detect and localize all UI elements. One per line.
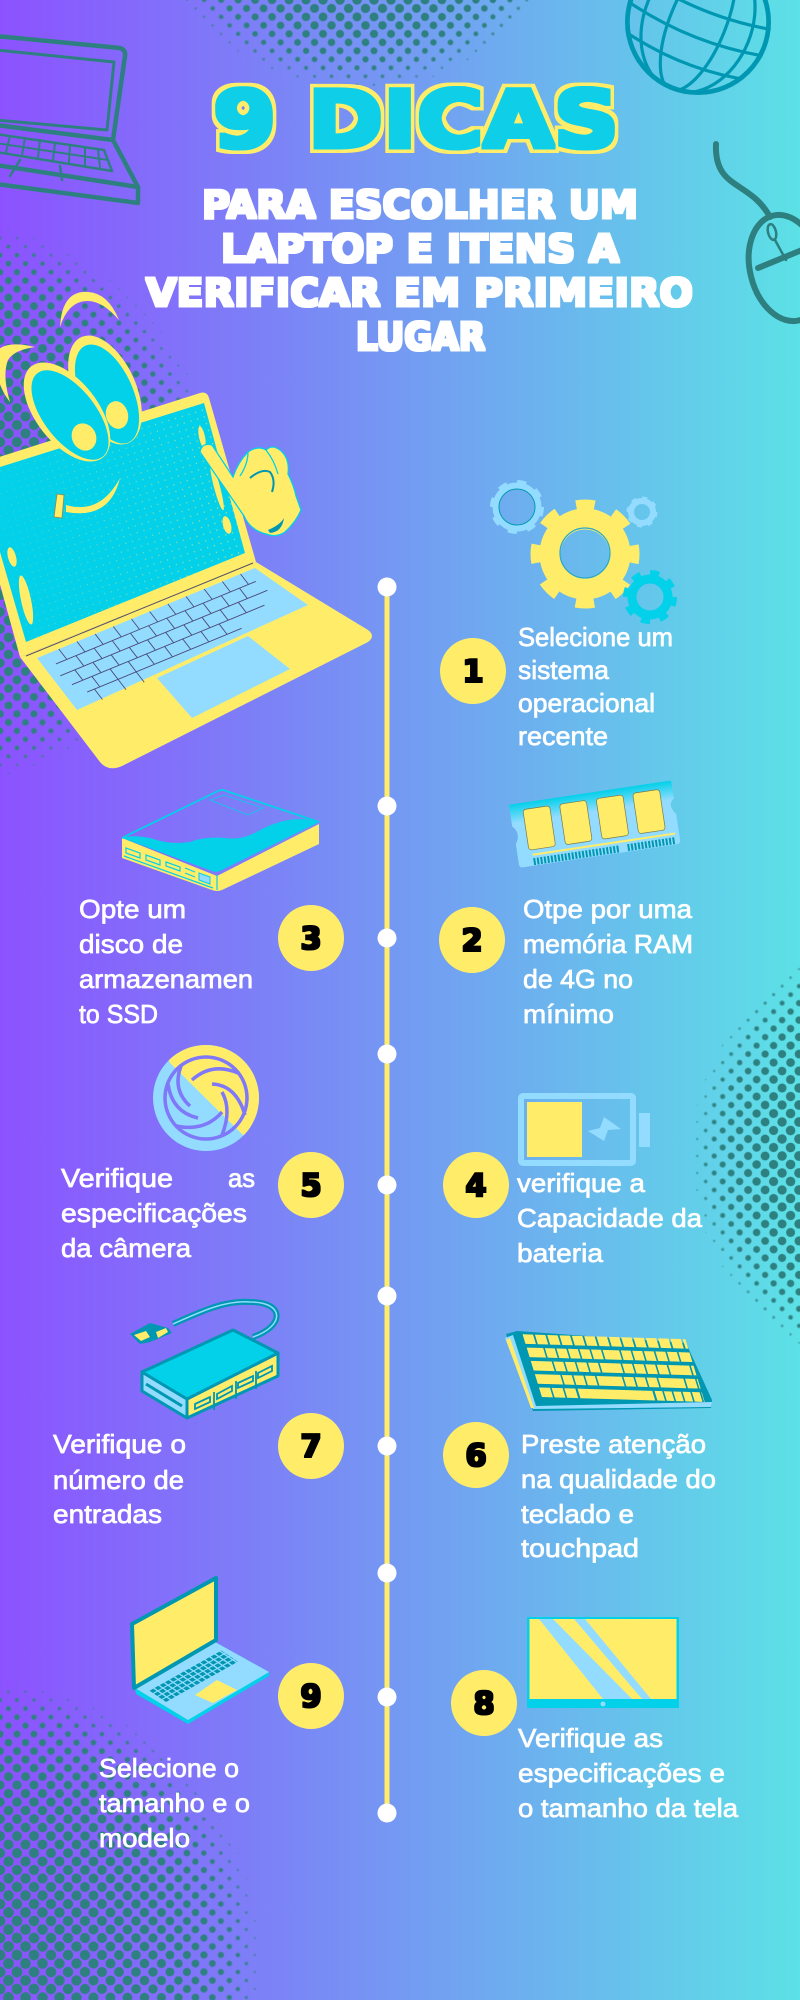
text 8: especificações e [518,1758,725,1788]
reflections [6,426,233,625]
text 4 [517,1168,703,1268]
halftone: right [696,968,800,1344]
icon: small laptop [132,1578,269,1724]
badge 6 [443,1422,509,1488]
badge 9 [278,1663,344,1729]
text 6: Preste atenção [521,1429,706,1459]
step 9 [99,1578,344,1853]
right eye [53,324,157,456]
step 7 [53,1302,344,1529]
text 3 [79,894,253,1029]
subtitle: LUGAR [356,315,485,359]
smile [66,478,120,513]
text 1: recente [518,721,608,751]
step 1 [440,482,674,751]
text 5: Verifique [61,1163,173,1193]
text 1: sistema [518,655,610,685]
text 8: o tamanho da tela [518,1793,739,1823]
text 6: teclado e [521,1499,634,1529]
text 9: modelo [99,1823,190,1853]
text 3: armazenamen [79,964,253,994]
text 5 [61,1163,255,1263]
badge 1: 1 [462,654,484,690]
icon: monitor [527,1617,679,1708]
subtitle [146,183,693,359]
badge 6: 6 [465,1438,487,1474]
icon: gears [492,482,674,621]
step 8 [451,1617,739,1823]
badge 5: 5 [300,1168,322,1204]
step 6 [443,1331,716,1563]
step 5 [61,1040,344,1263]
icon: battery [521,1096,650,1163]
text 2 [523,894,693,1029]
step 2 [439,780,693,1029]
badge 4 [443,1152,509,1218]
text 6: na qualidade do [521,1464,716,1494]
badge 4: 4 [465,1168,487,1204]
laptop lid [0,393,256,657]
icon: USB hub [130,1302,278,1418]
icon: outline mouse [716,144,800,329]
badge 8 [451,1670,517,1736]
text 3: Opte um [79,894,186,924]
badge 7 [278,1413,344,1479]
eyebrows [60,292,119,327]
text 9: Selecione o [99,1753,239,1783]
laptop screen [0,403,245,642]
badge 3: 3 [300,921,322,957]
icon: RAM module [509,780,681,868]
text 3: to SSD [79,999,158,1029]
left eye [7,347,127,477]
icon: globe [625,0,771,95]
badge 1 [440,638,506,704]
text 2: de 4G no [523,964,633,994]
text 7: Verifique o [53,1429,186,1459]
timeline [378,578,396,1822]
text 1: operacional [518,688,655,718]
badge 2: 2 [461,923,483,959]
pointing hand [200,444,301,536]
text 4: bateria [517,1238,604,1268]
text 7 [53,1429,186,1529]
badge 3 [278,905,344,971]
badge 2 [439,907,505,973]
subtitle: PARA ESCOLHER UM [202,183,638,227]
hinge line [26,563,253,656]
halftone: bottom left [0,1682,256,2000]
badge 5 [278,1152,344,1218]
text 5: da câmera [61,1233,192,1263]
text 9 [99,1753,250,1853]
touchpad [157,636,290,718]
text 3: disco de [79,929,183,959]
text 4: Capacidade da [517,1203,703,1233]
text 1 [518,622,673,751]
step 3 [79,790,344,1029]
halftone: top [186,0,529,86]
subtitle: VERIFICAR EM PRIMEIRO [146,271,693,315]
halftone: left [0,228,189,774]
badge 8: 8 [473,1686,495,1722]
text 8: Verifique as [518,1723,663,1753]
text 4: verifique a [517,1168,646,1198]
icon: camera lens [153,1045,259,1151]
laptop base [20,562,372,768]
text 6: touchpad [521,1533,639,1563]
badge 9: 9 [300,1679,322,1715]
text 9: tamanho e o [99,1788,250,1818]
icon: SSD drive [122,790,319,891]
title: 9 DICAS [213,76,619,166]
text 6 [521,1429,716,1563]
text 5: especificações [61,1198,247,1228]
text 8 [518,1723,739,1823]
keyboard [37,568,308,710]
icon: keyboard [505,1331,712,1411]
illustration: hero laptop character [0,292,372,768]
text 7: número de [53,1465,184,1495]
subtitle: LAPTOP E ITENS A [221,227,620,271]
text 2: mínimo [523,999,614,1029]
step 4 [443,1096,703,1268]
text 2: Otpe por uma [523,894,693,924]
icon: outline laptop [0,36,138,203]
text 1: Selecione um [518,622,673,652]
text 7: entradas [53,1499,162,1529]
text 5: as [228,1163,255,1193]
text 2: memória RAM [523,929,693,959]
badge 7: 7 [300,1429,322,1465]
